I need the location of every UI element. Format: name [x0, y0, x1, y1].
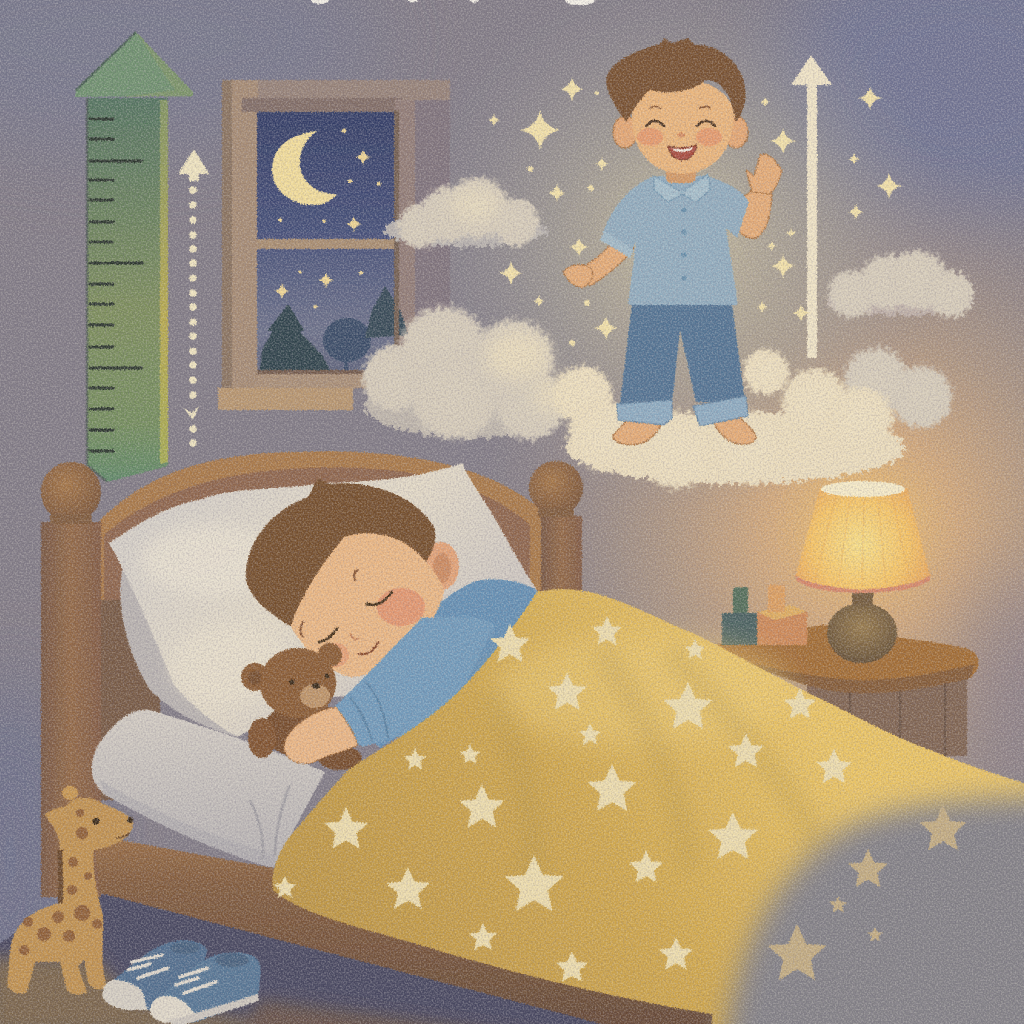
left cloud mass: [359, 302, 615, 443]
head: [632, 80, 734, 174]
left hand: [563, 265, 593, 288]
growth chart: [75, 32, 193, 482]
window stars: [274, 129, 381, 309]
back shoe: [102, 940, 207, 1010]
hand: [284, 707, 358, 763]
happy eyes: [646, 121, 715, 126]
cropped title remnants: [311, 0, 595, 5]
smile: [359, 642, 378, 654]
front shoe: [150, 952, 261, 1023]
window: [218, 80, 450, 410]
bed side rail: [93, 835, 740, 1024]
small cloud by window: [383, 175, 547, 250]
muntin: [257, 239, 397, 249]
stars in shadow: [768, 805, 967, 980]
ear: [423, 542, 459, 590]
star quilt blanket: [272, 589, 1024, 1024]
neck: [666, 165, 696, 183]
shaded blanket corner: [720, 795, 1024, 1024]
standing boy in pajamas: [563, 38, 782, 445]
window sill: [218, 388, 353, 410]
night sky glass: [257, 112, 408, 370]
smile: [668, 145, 697, 160]
hair: [246, 478, 435, 627]
face: [291, 531, 444, 677]
moon: [272, 131, 337, 205]
shirt: [603, 176, 749, 305]
pine trees: [260, 286, 408, 370]
right arm: [736, 190, 772, 238]
pants: [617, 304, 748, 426]
mattress: [92, 710, 325, 868]
pajama arm: [334, 616, 495, 747]
sparkles around boy: [488, 77, 902, 346]
toy blocks: [722, 585, 807, 645]
bed headboard and posts: [41, 451, 583, 897]
sleeping boy: [241, 478, 540, 770]
big growth arrow: [791, 55, 832, 358]
quilt stars: [274, 616, 852, 982]
glowing lamp: [796, 481, 930, 663]
waving hand: [747, 154, 782, 194]
closed eyes: [319, 592, 392, 642]
small dotted growth arrow: [178, 149, 209, 447]
right cloud mass: [565, 345, 955, 492]
toy giraffe: [7, 786, 133, 994]
feet: [613, 414, 756, 445]
ears: [613, 116, 637, 148]
right bedpost: [541, 516, 582, 606]
blue sneakers: [102, 940, 261, 1024]
floor under bed: [0, 880, 730, 1024]
teddy bear: [241, 643, 362, 770]
pillow: [109, 463, 537, 737]
big cloud under boy: [359, 302, 955, 492]
left bedpost: [41, 522, 101, 897]
nightstand: [713, 625, 978, 756]
left arm: [576, 236, 634, 286]
small cloud on right: [826, 248, 976, 320]
hair: [606, 38, 746, 122]
pajama torso: [345, 580, 540, 748]
